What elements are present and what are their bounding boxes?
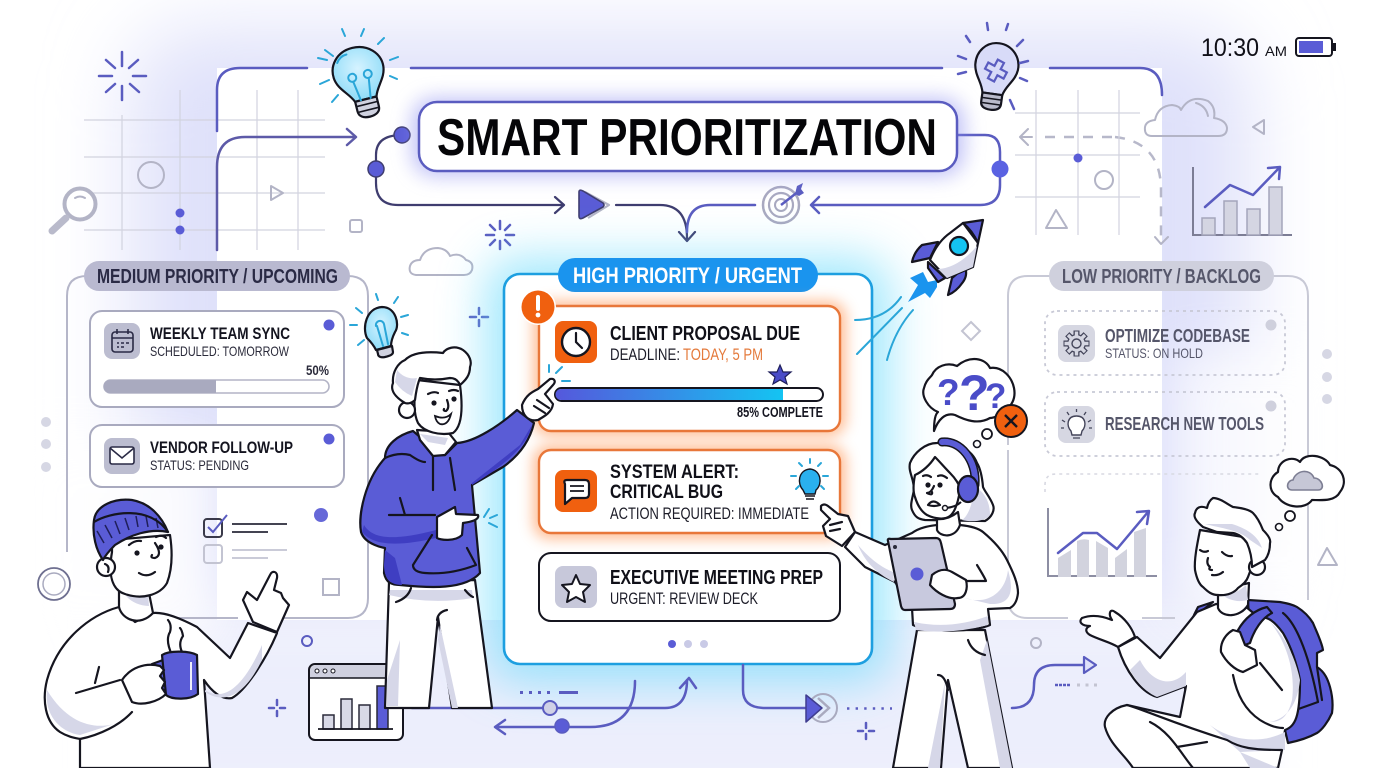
small shapes right (470, 308, 1337, 648)
icon: magnifier (52, 188, 96, 231)
card: weekly team sync: SCHEDULED: TOMORROW (150, 343, 290, 359)
side dots right (1322, 349, 1332, 404)
card: executive meeting: EXECUTIVE MEETING PREP (610, 567, 823, 589)
icon: small bulb beside presenter (350, 294, 408, 357)
icon: forward arrow (806, 694, 892, 739)
card: vendor follow-up: STATUS: PENDING (150, 457, 249, 473)
clock and battery status (1201, 34, 1336, 62)
checklist (204, 515, 287, 563)
card: optimize codebase: STATUS: ON HOLD (1105, 345, 1203, 361)
icon: burst upper left (99, 52, 146, 100)
backpack (1183, 600, 1333, 743)
thought cloud (1270, 456, 1344, 530)
right strap (1238, 607, 1272, 645)
bottom connectors (412, 665, 806, 734)
card: system alert: CRITICAL BUG (610, 481, 723, 503)
card: executive meeting: URGENT: REVIEW DECK (610, 589, 758, 608)
character: man with beanie and mug (45, 500, 289, 768)
card: vendor follow-up: VENDOR FOLLOW-UP (150, 438, 293, 457)
mini bar chart upper right (1193, 167, 1292, 235)
icon: play arrow (579, 190, 609, 219)
face (914, 457, 960, 519)
card: vendor follow-up (90, 425, 344, 487)
pagination dots (668, 640, 708, 648)
icon: target (763, 183, 804, 223)
card: research new tools: RESEARCH NEW TOOLS (1105, 414, 1264, 434)
neck (1218, 583, 1249, 615)
raised hand (243, 572, 289, 632)
pointing hand low (437, 507, 478, 540)
panel: low priority: LOW PRIORITY / BACKLOG (1062, 266, 1261, 288)
title banner (412, 98, 964, 176)
connector frame lines (217, 68, 1168, 250)
right lower arrow connector (1012, 657, 1097, 708)
card: weekly team sync: WEEKLY TEAM SYNC (150, 324, 290, 343)
beanie (93, 500, 168, 560)
card: executive meeting (539, 553, 840, 621)
panel: medium priority: MEDIUM PRIORITY / UPCOMING (97, 266, 338, 288)
legs (893, 630, 1012, 768)
speech bubble: ? (959, 365, 990, 421)
card: client proposal: TODAY, 5 PM (683, 345, 763, 364)
hand on tablet (930, 570, 967, 598)
head (1194, 498, 1270, 595)
pointing hand (821, 504, 855, 546)
sweater (845, 525, 1018, 632)
open hand (1080, 611, 1135, 647)
fist (1221, 630, 1257, 672)
motion ticks (484, 365, 570, 527)
card: optimize codebase: OPTIMIZE CODEBASE (1105, 326, 1250, 346)
title connectors (368, 127, 1008, 241)
panel: high priority: HIGH PRIORITY / URGENT (573, 263, 802, 288)
side dots left (41, 417, 51, 472)
clock and battery status: AM (1265, 43, 1287, 59)
neck (937, 512, 960, 535)
speech bubble: ? (985, 377, 1006, 416)
chart window (309, 664, 403, 740)
decorative rings and sparkle left (38, 568, 312, 716)
pants (385, 580, 492, 708)
headset (942, 442, 978, 510)
speech bubble: ? (937, 372, 960, 413)
decorative grid: upper right (1015, 90, 1140, 235)
card: system alert: SYSTEM ALERT: (610, 461, 739, 483)
chart: low priority trend (1048, 508, 1157, 577)
character: woman with headset (821, 359, 1027, 768)
card: client proposal: 85% COMPLETE (737, 405, 823, 421)
card: system alert: ACTION REQUIRED: IMMEDIATE (610, 504, 809, 523)
icon: light bulb top left (318, 29, 398, 123)
card: client proposal: CLIENT PROPOSAL DUE (610, 323, 800, 345)
card: system alert (533, 445, 846, 539)
alert badge (520, 289, 556, 325)
character: seated man with backpack (1080, 456, 1344, 768)
panel: low priority (1008, 261, 1308, 618)
title banner: SMART PRIORITIZATION (437, 109, 937, 167)
hair back (910, 443, 994, 521)
card: client proposal: DEADLINE: (610, 345, 680, 364)
card: research new tools (1045, 392, 1285, 456)
torso (45, 607, 277, 768)
character: presenter in hoodie (360, 347, 570, 708)
neck and head (392, 347, 471, 456)
icon: cloud upper right (1145, 99, 1227, 136)
icon: small triangle (1253, 120, 1264, 134)
panel: high priority (486, 258, 890, 682)
torso and arm (1105, 604, 1300, 768)
icon: burst centre (486, 221, 514, 249)
tablet (888, 538, 955, 610)
panel: medium priority (67, 261, 368, 618)
card: optimize codebase (1045, 311, 1285, 375)
pointing hand high (522, 379, 555, 420)
icon: cloud centre (410, 248, 472, 275)
neck and head (97, 535, 172, 621)
decorative grid: upper left (84, 90, 362, 250)
speech bubble (923, 359, 1027, 448)
icon: light bulb top right (958, 23, 1028, 113)
mug (150, 620, 198, 699)
hand on mug (122, 665, 166, 704)
card: client proposal (533, 301, 846, 436)
rocket (855, 220, 983, 360)
hoodie (360, 410, 534, 587)
card: weekly team sync (90, 311, 344, 407)
clock and battery status: 10:30 (1201, 34, 1259, 62)
icon: alert bulb (791, 459, 828, 499)
card: weekly team sync: 50% (306, 362, 329, 378)
